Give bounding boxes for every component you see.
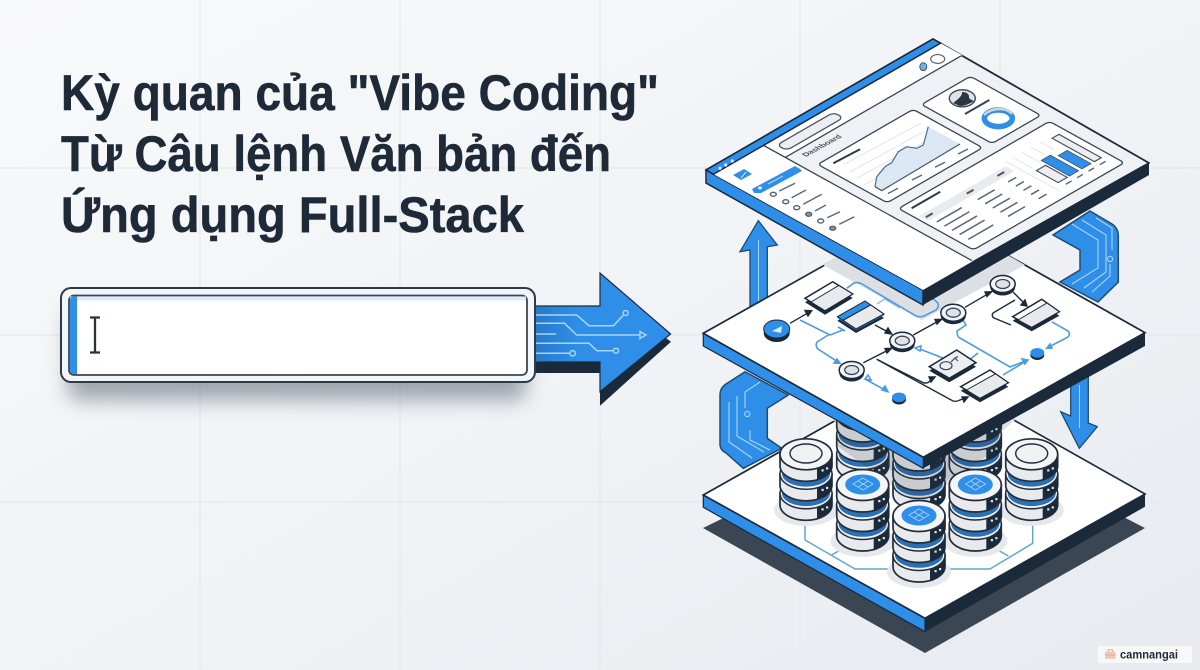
flow card 5 (961, 370, 1008, 402)
layer 1: interface platform (706, 39, 1149, 305)
flow card 2 highlighted (837, 301, 884, 333)
database right (1000, 439, 1064, 526)
layer 2: logic platform (703, 209, 1145, 468)
watermark badge: camnangai (1120, 650, 1178, 662)
donut chart (984, 109, 1012, 127)
window dots and header icons (718, 54, 945, 170)
database network lines (805, 522, 1033, 569)
avatar (949, 90, 975, 107)
chart card (818, 109, 983, 203)
database blue front (887, 500, 951, 588)
database blue mid-right (943, 470, 1007, 557)
dashboard frame (706, 39, 1150, 290)
start node (764, 320, 790, 342)
arrow: prompt to application (535, 273, 671, 406)
logic flow black connections (790, 292, 1027, 402)
connector: data to logic (720, 372, 788, 468)
profile card (922, 76, 1041, 143)
database left (774, 439, 838, 526)
flow card 1 (805, 282, 853, 315)
layer 3: data platform (703, 370, 1145, 632)
database blue mid-left (831, 470, 895, 557)
title: Kỳ quan của "Vibe Coding" (61, 65, 659, 121)
title: Ứng dụng Full-Stack (61, 187, 524, 243)
back database cylinders (836, 400, 1002, 510)
text cursor (90, 318, 100, 352)
search pill (777, 112, 843, 150)
title (61, 65, 659, 243)
dashboard heading: Dashboard (800, 134, 844, 158)
flow card 3 (1013, 299, 1059, 331)
prompt input box (61, 288, 535, 400)
watermark badge (1098, 646, 1192, 663)
arrow: down (1061, 370, 1097, 448)
connector: logic to interface (1053, 211, 1118, 302)
title: Từ Câu lệnh Văn bản đến (61, 126, 611, 182)
layer 3: database shadow (703, 510, 1145, 653)
arrow: up (740, 221, 777, 310)
sidebar navigation (733, 166, 854, 230)
logic flow blue connections (800, 283, 1070, 392)
data table and bar chart card (899, 121, 1124, 250)
flow nodes (839, 276, 1044, 404)
flow card 4 branch icon (929, 350, 976, 382)
bar chart (1016, 134, 1107, 186)
